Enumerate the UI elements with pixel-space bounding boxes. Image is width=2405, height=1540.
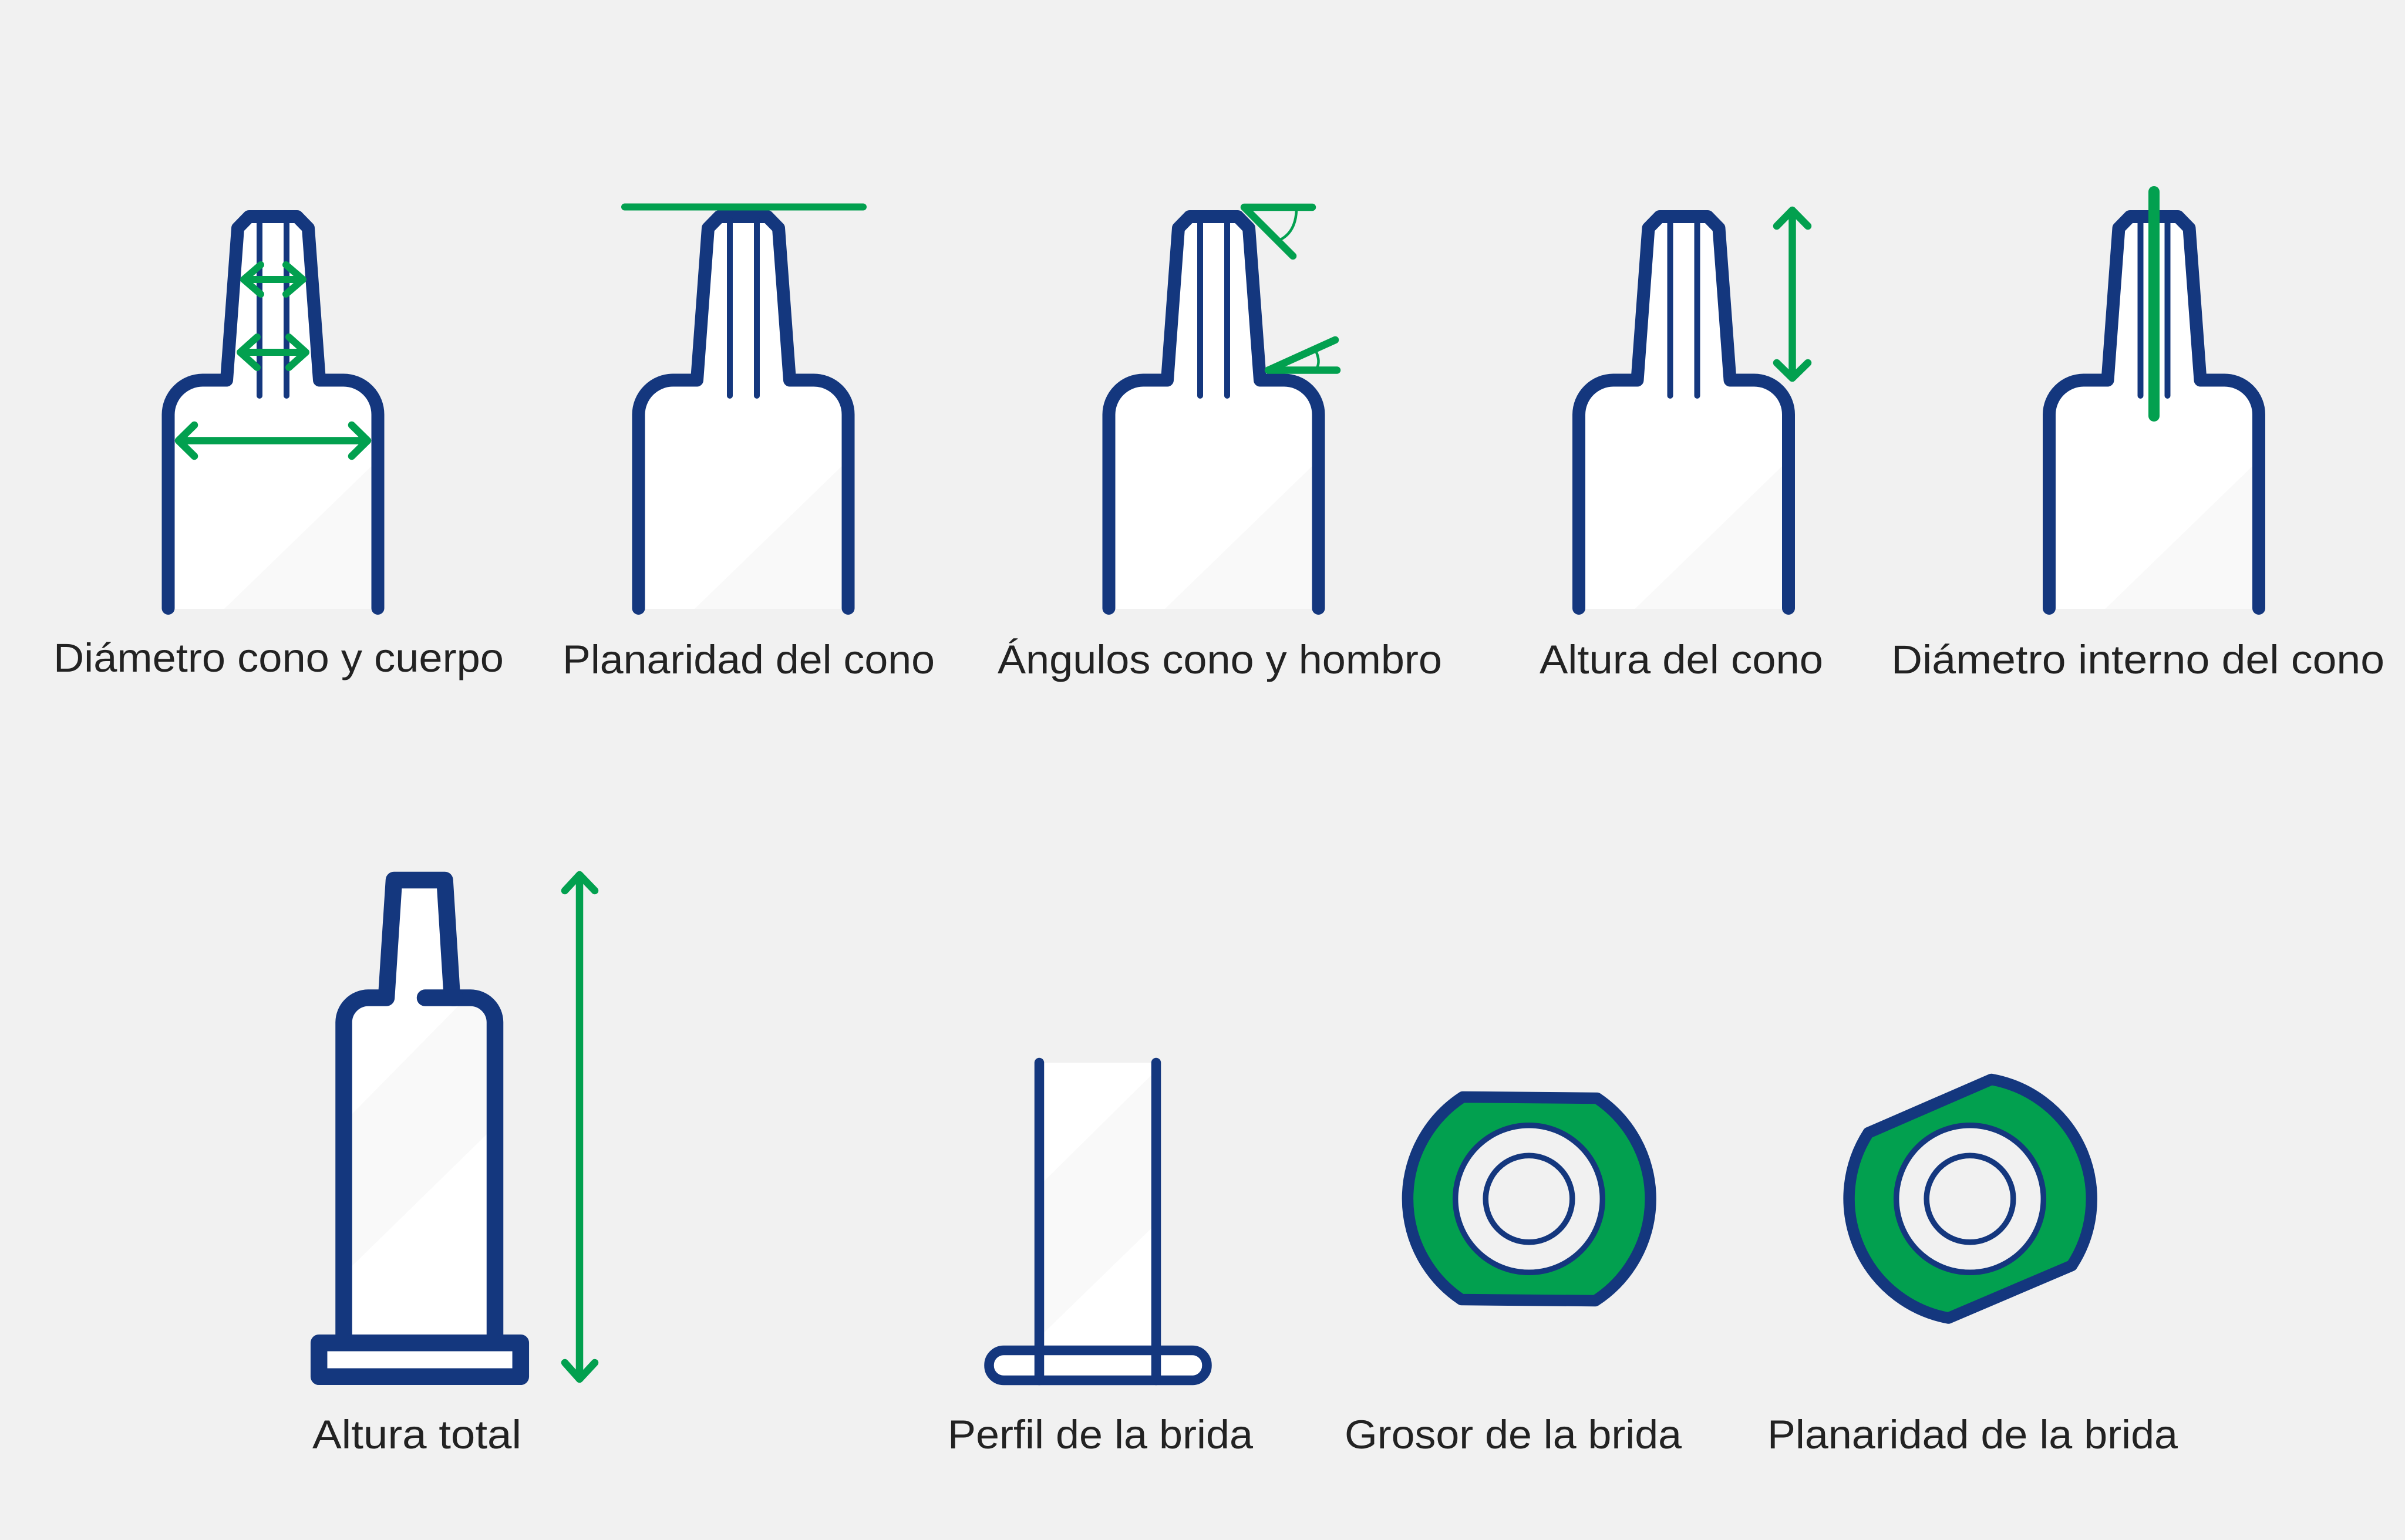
- bottle: inner diameter: [2049, 217, 2259, 609]
- label: cone inner diameter: Diámetro interno del cono: [1891, 637, 2384, 682]
- label: cone flatness: Planaridad del cono: [562, 637, 935, 682]
- panel: total height: [312, 875, 595, 1457]
- panel: flange profile: [948, 1063, 1254, 1457]
- panel: cone height: [1540, 210, 1823, 682]
- line: inner diameter probe: [2148, 191, 2160, 416]
- label: cone height: Altura del cono: [1540, 637, 1823, 682]
- label: cone and body diameter: Diámetro cono y cuerpo: [53, 635, 504, 680]
- label: cone and shoulder angles: Ángulos cono y hombro: [998, 637, 1442, 682]
- label: flange flatness: Planaridad de la brida: [1767, 1412, 2178, 1457]
- bottle: cone flatness: [639, 217, 848, 609]
- drawing: flange profile: [989, 1063, 1207, 1380]
- angle: shoulder: [1268, 340, 1337, 370]
- arrow: total height: [565, 875, 595, 1379]
- bottle: cone height: [1579, 217, 1788, 609]
- panel: cone and body diameter: [53, 217, 504, 680]
- panel: cone and shoulder angles: [998, 207, 1442, 682]
- panel: flange flatness: [1767, 1079, 2178, 1457]
- flange: rotated top view: [1849, 1079, 2091, 1318]
- line: flatness reference: [625, 203, 863, 210]
- panel: cone inner diameter: [1891, 191, 2384, 682]
- flange: top view: [1407, 1097, 1651, 1301]
- arrow: lower cone diameter: [240, 337, 306, 368]
- angle: cone top: [1244, 207, 1312, 256]
- label: flange thickness: Grosor de la brida: [1345, 1412, 1682, 1457]
- bottle: angles: [1109, 217, 1319, 609]
- arrow: upper cone diameter: [244, 265, 303, 294]
- panel: flange thickness: [1345, 1097, 1682, 1457]
- label: flange profile: Perfil de la brida: [948, 1412, 1254, 1457]
- label: total height: Altura total: [312, 1412, 521, 1457]
- bottle: full syringe: [319, 880, 521, 1377]
- panel: cone flatness: [562, 207, 935, 682]
- bottle: cone and body: [168, 217, 378, 609]
- arrow: cone height: [1777, 210, 1808, 378]
- arrow: body diameter: [178, 425, 368, 456]
